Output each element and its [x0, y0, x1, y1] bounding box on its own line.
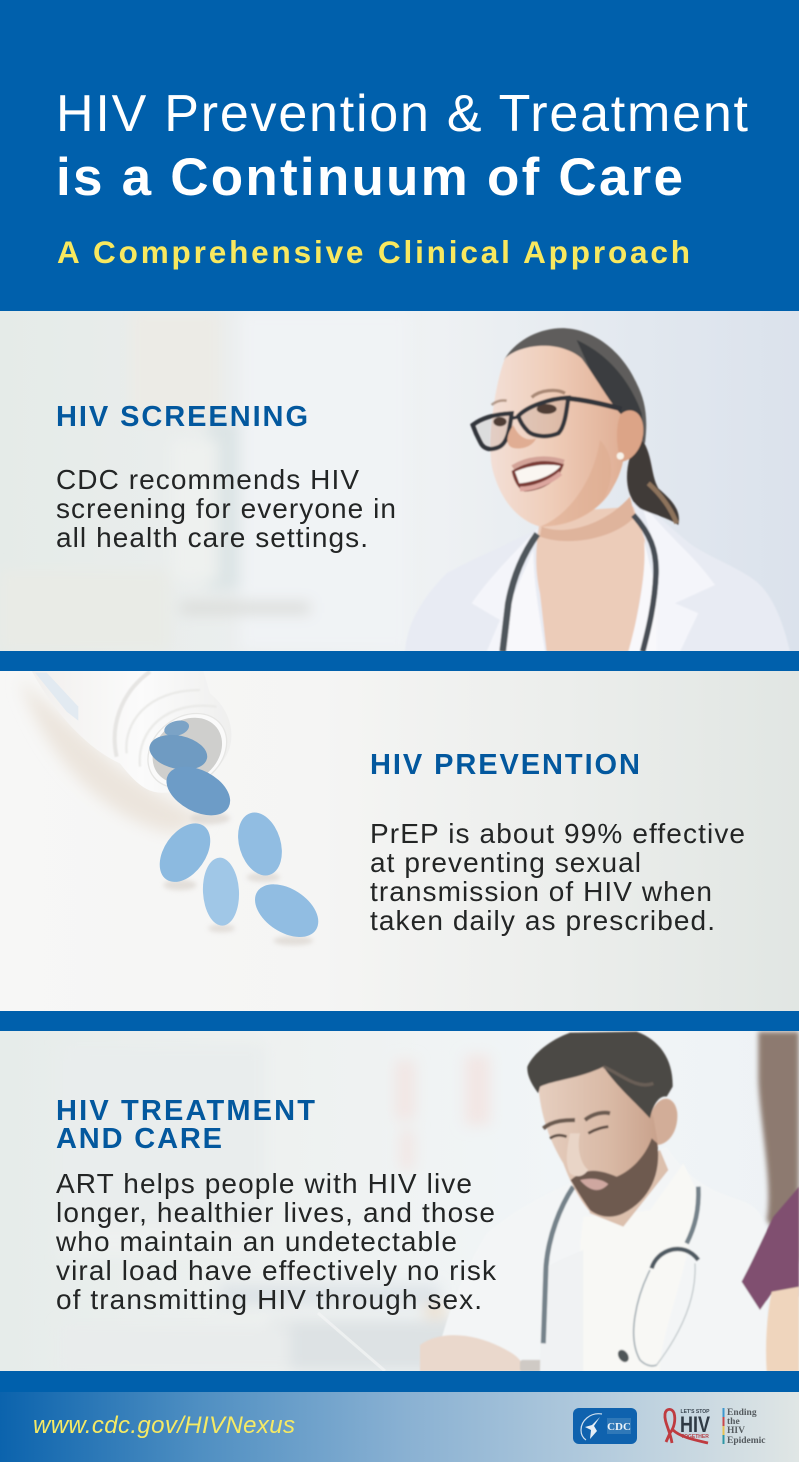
heading: HIV treatment and care: [56, 1095, 315, 1155]
face: [490, 346, 625, 527]
text: HIV prevention: taken daily as prescribed.: [370, 905, 715, 936]
text: HIV treatment and care: of transmitting HIV through sex.: [56, 1284, 482, 1315]
brows: [532, 390, 565, 397]
glasses: [473, 398, 568, 449]
heading: HIV screening: HIV SCREENING: [56, 401, 308, 433]
pill: [201, 857, 241, 927]
title: HIV Prevention & Treatment: [56, 85, 749, 143]
pills in bottle: [164, 720, 189, 736]
face: [538, 1063, 658, 1217]
title: [56, 85, 749, 207]
photo: doctor: [420, 1032, 799, 1372]
logo: Ending the HIV Epidemic: HIV: [727, 1426, 745, 1436]
pill: [160, 823, 210, 882]
logo: CDC: CDC: [607, 1421, 631, 1433]
white coat: [442, 1148, 767, 1336]
patient hair: [758, 1032, 799, 1263]
stethoscope: [543, 1187, 698, 1366]
ear: [650, 1099, 677, 1145]
photo: smiling clinician: [469, 327, 790, 651]
pill shadows: [163, 812, 313, 945]
nose: [507, 425, 536, 448]
text: HIV screening: all health care settings.: [56, 522, 368, 553]
nose shading: [567, 1133, 588, 1176]
logo: Ending the HIV Epidemic: the: [727, 1417, 740, 1427]
footer URL: www.cdc.gov/HIVNexus: [33, 1412, 295, 1439]
neck and chest: [536, 507, 645, 652]
panel: HIV treatment and care: [0, 1031, 799, 1372]
hair: [527, 1032, 673, 1118]
subtitle: A Comprehensive Clinical Approach: [57, 234, 690, 270]
white coat: [514, 502, 790, 651]
bottle mouth: [147, 713, 227, 787]
pill: [166, 768, 230, 816]
text: HIV screening: [56, 464, 396, 553]
photo: spilled pills: [20, 671, 328, 948]
logo: Let's Stop HIV Together: TOGETHER: [681, 1434, 709, 1440]
logo: Ending the HIV Epidemic: Epidemic: [727, 1436, 766, 1446]
blurred background: [222, 1056, 490, 1371]
text: HIV screening: screening for everyone in: [56, 493, 396, 524]
title: is a Continuum of Care: [56, 148, 683, 207]
text: HIV treatment and care: ART helps people with HIV live: [56, 1168, 472, 1199]
inner shirt: [506, 552, 544, 651]
logo: Ending the HIV Epidemic: [722, 1408, 766, 1446]
text: HIV treatment and care: [55, 1168, 497, 1315]
text: HIV treatment and care: who maintain an undetectable: [55, 1226, 457, 1257]
text: HIV screening: CDC recommends HIV: [56, 464, 359, 495]
logo: Let's Stop HIV Together: [665, 1409, 710, 1443]
text: HIV prevention: [370, 818, 745, 936]
text: HIV treatment and care: viral load have effectively no risk: [56, 1255, 497, 1286]
heading: HIV prevention: HIV PREVENTION: [370, 749, 640, 781]
hand: [420, 1335, 523, 1372]
text: HIV prevention: at preventing sexual: [370, 847, 641, 878]
shirt: [682, 1166, 684, 1168]
collars: [472, 537, 531, 651]
panel: HIV prevention: [0, 671, 799, 1011]
logo: CDC: [573, 1408, 637, 1444]
bottle shadow: [24, 690, 195, 835]
logo: Let's Stop HIV Together: LET'S STOP: [681, 1409, 710, 1415]
brows and eyes: [543, 1113, 610, 1128]
ear and pearl earring: [617, 410, 643, 462]
eyes: [537, 404, 557, 414]
watch: [520, 1359, 541, 1371]
bottle label: [35, 673, 78, 721]
hair: [504, 328, 646, 443]
text: HIV treatment and care: longer, healthier lives, and those: [56, 1197, 495, 1228]
neck: [583, 1150, 668, 1227]
lab coat lapel: [540, 1360, 547, 1371]
smile: [512, 461, 564, 492]
ponytail: [627, 437, 679, 525]
patient shoulder: [742, 1187, 799, 1310]
heading: HIV treatment and care: HIV TREATMENT: [56, 1095, 315, 1127]
footer band: [0, 1392, 799, 1462]
logo: Ending the HIV Epidemic: Ending: [727, 1408, 757, 1418]
blurred background: [183, 421, 304, 616]
heading: HIV treatment and care: AND CARE: [56, 1123, 222, 1155]
pill: [238, 812, 282, 876]
logo: Let's Stop HIV Together: HIV: [680, 1412, 710, 1437]
stethoscope: [503, 534, 537, 652]
bottle: [32, 671, 166, 792]
pill: [255, 884, 318, 937]
text: HIV prevention: transmission of HIV when: [370, 876, 712, 907]
text: HIV prevention: PrEP is about 99% effective: [370, 818, 745, 849]
panel: HIV screening: [0, 311, 799, 652]
